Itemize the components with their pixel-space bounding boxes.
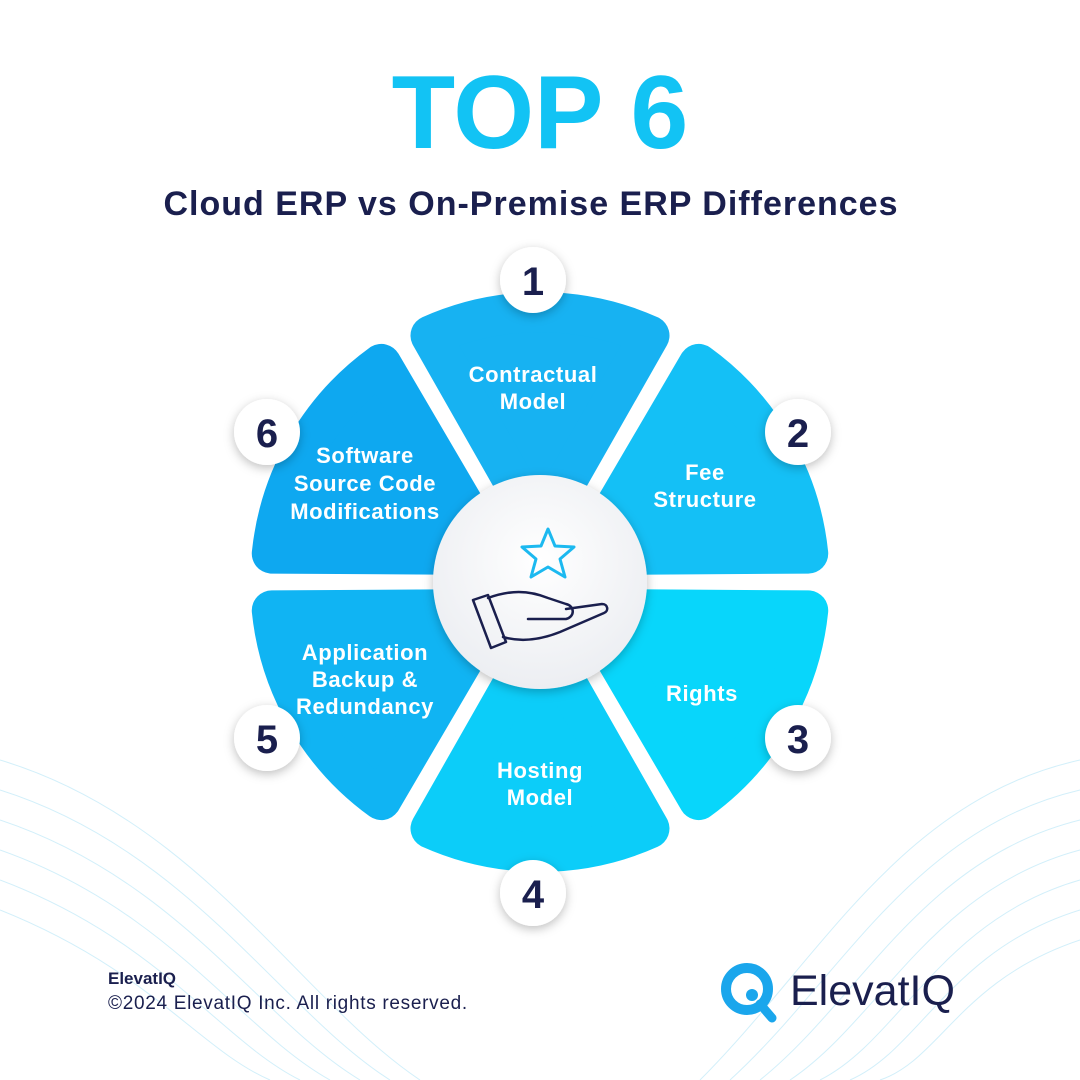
title: TOP 6 <box>392 55 688 171</box>
petal labels: Fee <box>685 460 725 485</box>
number badges: 2 <box>787 412 809 456</box>
petal labels: Contractual <box>469 362 597 387</box>
number badges: 3 <box>787 718 809 762</box>
petal labels: Source Code <box>294 471 436 496</box>
subtitle: Cloud ERP vs On-Premise ERP Differences <box>164 185 898 223</box>
petal labels: Application <box>302 640 428 665</box>
icon: hand <box>473 592 607 648</box>
petal labels: Redundancy <box>296 694 434 719</box>
petal labels: Model <box>507 785 573 810</box>
petal labels: Model <box>500 389 566 414</box>
petal 4 <box>430 636 650 852</box>
petal labels: Hosting <box>497 758 583 783</box>
number badges <box>234 247 831 926</box>
petal labels: Structure <box>653 487 757 512</box>
petal 5 <box>252 514 548 812</box>
wheel of petals <box>252 312 828 852</box>
petal 6 <box>252 352 548 650</box>
icon: star <box>522 529 574 577</box>
petal labels: Modifications <box>290 499 440 524</box>
petal 2 <box>532 352 828 650</box>
petal labels: Software <box>316 443 414 468</box>
logo <box>726 967 955 1018</box>
number badges: 1 <box>522 260 544 304</box>
footer text: ElevatIQ <box>108 969 176 988</box>
logo: ElevatIQ <box>790 967 955 1015</box>
petal labels <box>290 362 757 810</box>
footer text <box>108 969 468 1014</box>
number badges: 4 <box>522 873 545 917</box>
petal labels: Rights <box>666 681 738 706</box>
petal 1 <box>430 312 650 528</box>
center circle with icon <box>433 475 647 689</box>
number badges: 6 <box>256 412 278 456</box>
petal 3 <box>532 514 828 812</box>
petal labels: Backup & <box>312 667 418 692</box>
number badges: 5 <box>256 718 278 762</box>
footer text: ©2024 ElevatIQ Inc. All rights reserved. <box>108 993 468 1014</box>
